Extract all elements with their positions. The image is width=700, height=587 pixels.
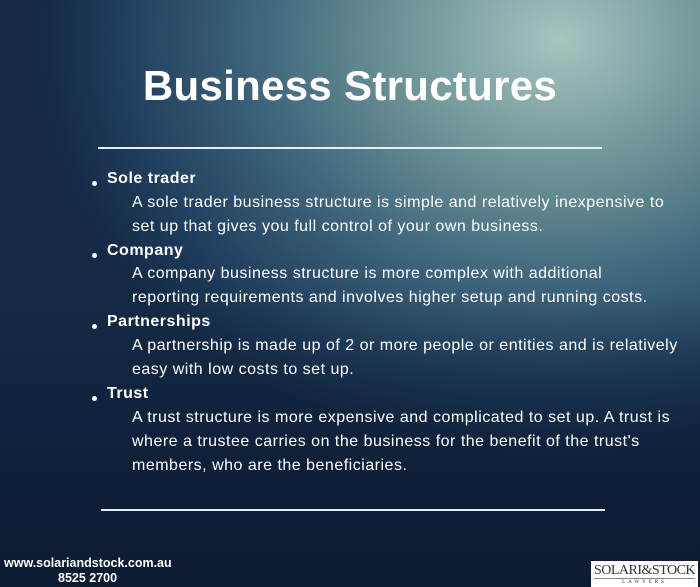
contact info: 8525 2700 [58, 571, 117, 585]
list of structures: A trust structure is more expensive and complicated to set up. A trust is [132, 409, 670, 426]
item: trust [92, 385, 670, 474]
list of structures: A sole trader business structure is simple and relatively inexpensive to [132, 194, 664, 211]
list of structures: reporting requirements and involves higher setup and running costs. [132, 289, 648, 306]
item: sole trader [92, 170, 664, 235]
item: company [92, 242, 648, 306]
list of structures: Sole trader [107, 170, 196, 187]
list of structures: easy with low costs to set up. [132, 361, 354, 378]
list of structures: A partnership is made up of 2 or more people or entities and is relatively [132, 337, 678, 354]
contact info [4, 556, 172, 585]
list of structures: members, who are the beneficiaries. [132, 457, 407, 474]
list of structures: set up that gives you full control of your own business. [132, 218, 543, 235]
logo [591, 561, 698, 587]
title: Business Structures [143, 62, 557, 109]
list of structures [92, 170, 678, 474]
contact info: www.solariandstock.com.au [4, 556, 172, 570]
list of structures: where a trustee carries on the business for the benefit of the trust's [132, 433, 640, 450]
logo: LAWYERS [622, 580, 667, 585]
list of structures: Company [107, 242, 183, 259]
list of structures: Partnerships [107, 313, 211, 330]
logo: SOLARI&STOCK [594, 563, 695, 578]
item: partnerships [92, 313, 678, 378]
list of structures: Trust [107, 385, 149, 402]
list of structures: A company business structure is more complex with additional [132, 265, 602, 282]
